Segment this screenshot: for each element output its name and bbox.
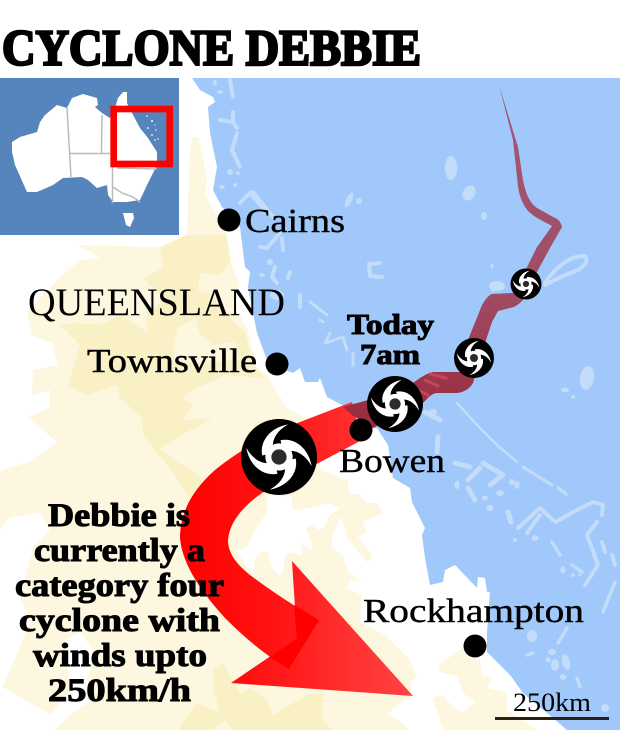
title: CYCLONE DEBBIE — [2, 21, 421, 77]
cyclone icon: medium — [454, 338, 494, 378]
arrow overlap — [270, 605, 319, 669]
callout text: cyclone with — [19, 603, 220, 639]
callout text: winds upto — [33, 638, 207, 674]
cyclone icon: large — [241, 419, 317, 495]
lighter island — [173, 318, 240, 362]
land shading: cream — [0, 137, 537, 730]
land shading: deeper cream — [60, 235, 333, 730]
label: Bowen: Bowen — [339, 443, 445, 480]
scale bar — [495, 688, 609, 720]
label: Today 7am — [347, 310, 434, 371]
callout text — [15, 498, 224, 709]
state borders — [67, 108, 157, 203]
reefs — [213, 80, 615, 712]
label: Cairns: Cairns — [245, 203, 345, 240]
reef highlights through track — [418, 374, 446, 395]
reef specks — [146, 115, 159, 141]
callout text: 250km/h — [48, 673, 191, 709]
label: Today 7am: 7am — [360, 340, 420, 371]
cyclone icon: today 7am — [367, 376, 423, 432]
callout text: Debbie is — [48, 498, 190, 534]
white patches in cream — [50, 495, 340, 730]
label: Townsville: Townsville — [87, 343, 257, 380]
cyclone icon: small — [510, 268, 542, 300]
city dot: Rockhampton — [464, 634, 486, 658]
arrow head — [231, 561, 413, 696]
storm track: ocean segment — [343, 85, 562, 428]
city dot: Cairns — [218, 208, 240, 232]
label: Queensland: QUEENSLAND — [28, 281, 285, 324]
callout text: category four — [15, 568, 224, 604]
locator box — [114, 109, 170, 164]
storm track: land segment in red — [180, 402, 413, 696]
city dot: Townsville — [266, 352, 288, 376]
label: Rockhampton: Rockhampton — [363, 593, 584, 630]
label: Today 7am: Today — [347, 310, 434, 341]
Australia mainland — [12, 92, 157, 202]
inset map: Australia — [0, 78, 179, 235]
Tasmania — [123, 213, 134, 227]
city dot: Bowen — [350, 418, 372, 442]
callout text: currently a — [34, 533, 205, 569]
scale bar: 250km — [513, 688, 591, 717]
